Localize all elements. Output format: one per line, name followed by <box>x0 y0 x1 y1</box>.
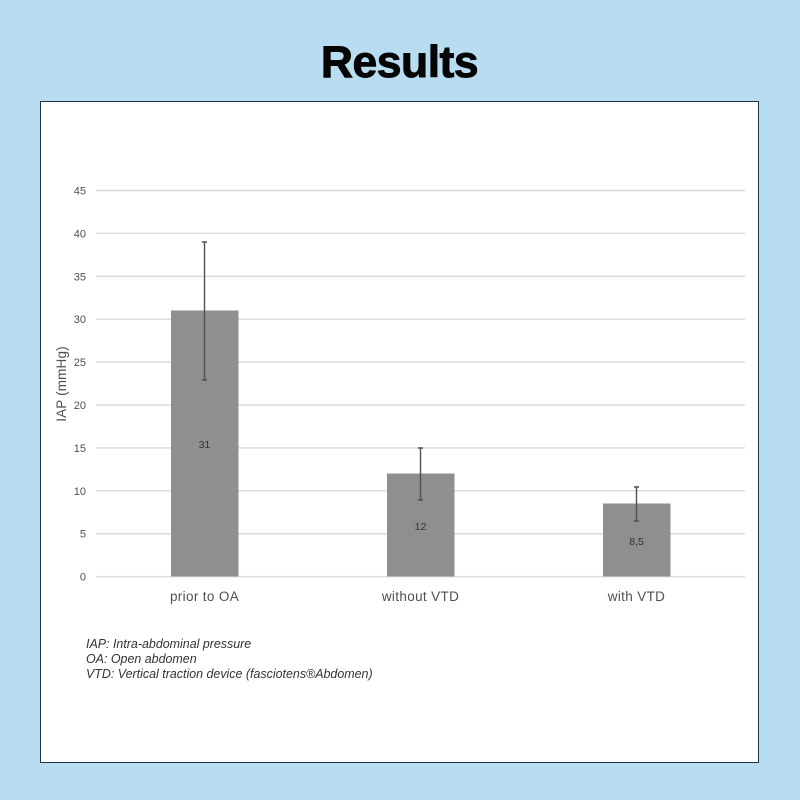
y-axis title: IAP (mmHg) <box>54 346 69 422</box>
abbreviations legend <box>86 637 373 681</box>
y-axis tick labels: 25 <box>74 357 86 369</box>
bar: with VTD <box>603 487 670 576</box>
abbreviations legend: IAP: Intra-abdominal pressure <box>86 637 251 651</box>
x-axis labels: with VTD <box>607 589 665 604</box>
y-axis tick labels <box>74 186 86 584</box>
x-axis labels: without VTD <box>381 589 459 604</box>
bar: without VTD <box>387 448 454 576</box>
y-axis tick labels: 40 <box>74 228 86 240</box>
panel: chart card <box>40 102 758 762</box>
y-axis tick labels: 35 <box>74 271 86 283</box>
bar: prior to OA <box>171 242 238 576</box>
bar: without VTD: 12 <box>415 521 426 533</box>
y-axis tick labels: 10 <box>74 486 86 498</box>
y-axis tick labels: 20 <box>74 400 86 412</box>
y-axis tick labels: 30 <box>74 314 86 326</box>
bar: with VTD: 8,5 <box>629 536 644 548</box>
y-axis tick labels: 0 <box>80 572 86 584</box>
x-axis labels: prior to OA <box>170 589 239 604</box>
abbreviations legend: OA: Open abdomen <box>86 652 197 666</box>
bar: prior to OA: 31 <box>199 439 210 451</box>
y-axis tick labels: 45 <box>74 186 86 198</box>
abbreviations legend: VTD: Vertical traction device (fasciotens®Abdomen) <box>86 667 373 681</box>
y-axis tick labels: 5 <box>80 529 86 541</box>
bar chart <box>54 186 745 604</box>
x-axis labels <box>170 589 665 604</box>
y-axis tick labels: 15 <box>74 443 86 455</box>
title: Results <box>321 38 478 87</box>
